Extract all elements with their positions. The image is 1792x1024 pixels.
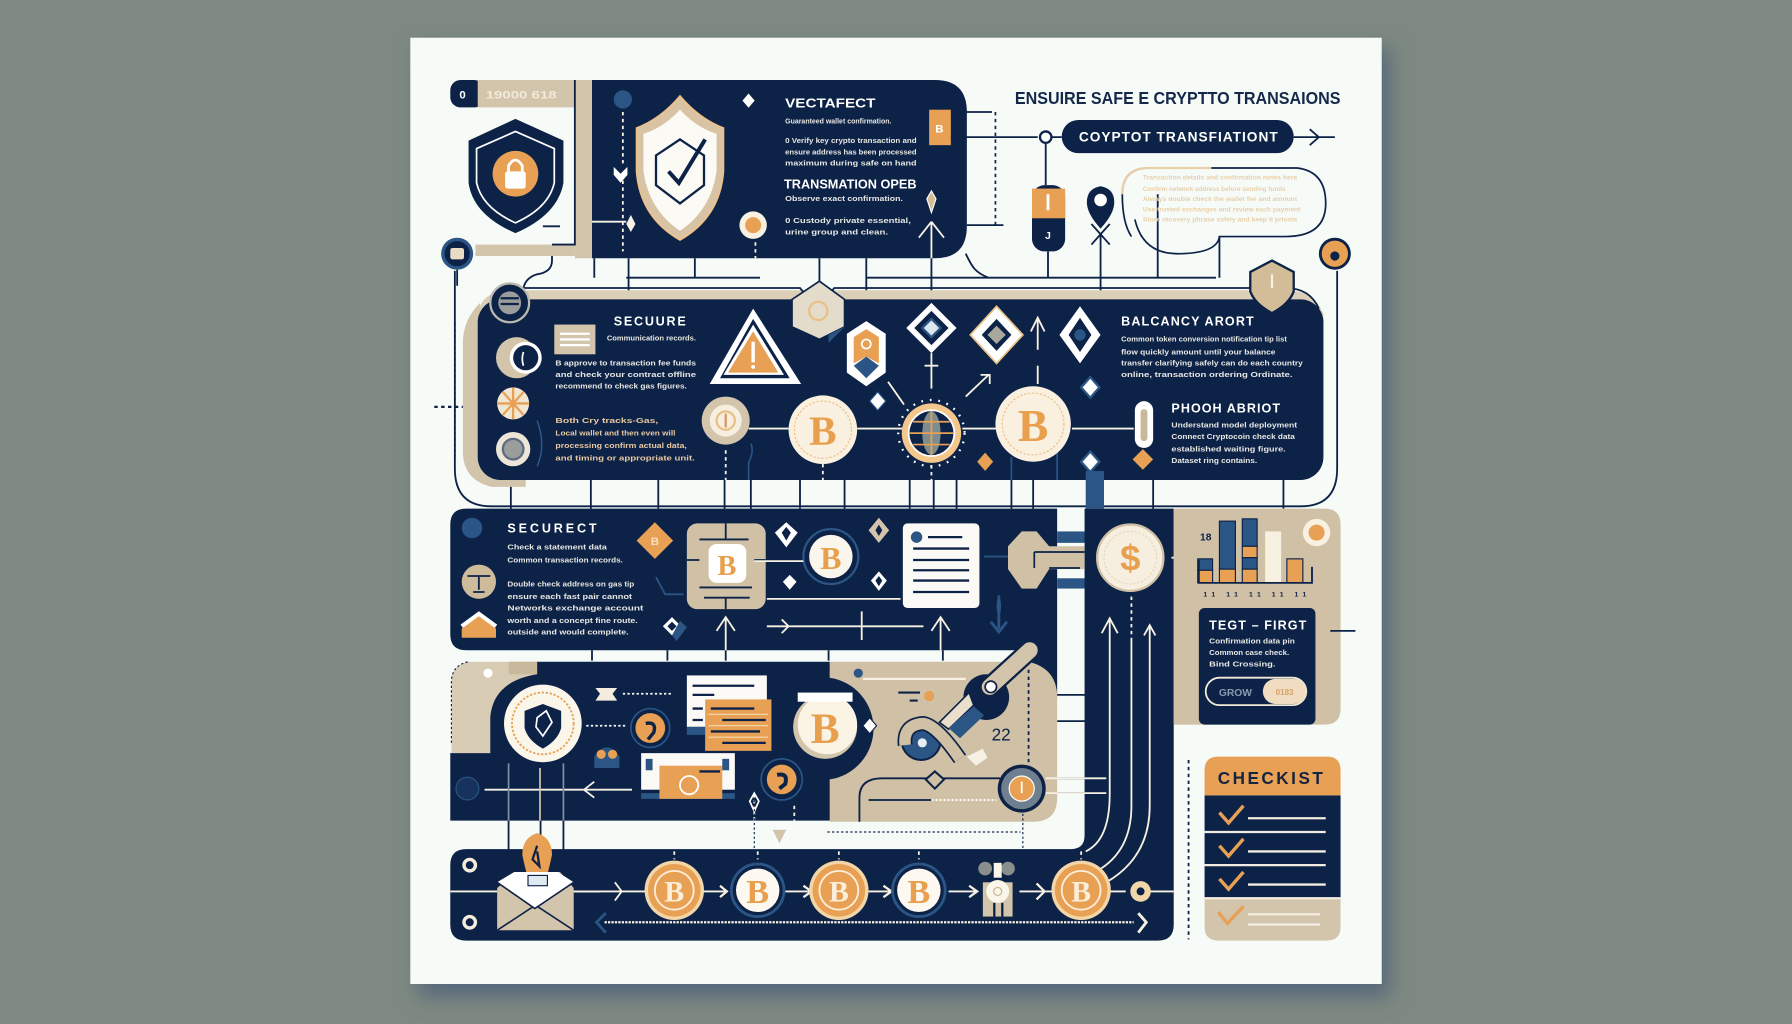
icon: capsule: J [1045, 231, 1051, 242]
test card: Common case check. [1209, 648, 1289, 657]
heading: VECTAFECT [785, 96, 876, 110]
text block: Common transaction records. [507, 555, 623, 564]
small diamonds [870, 377, 1153, 472]
chip box: B [717, 551, 736, 582]
text block [506, 543, 644, 636]
icon: warning triangle [710, 309, 801, 384]
node icon: right [1319, 238, 1351, 270]
tan left corner [451, 662, 537, 753]
flow arrows [574, 851, 1174, 901]
panel: top header tab and shield box: 0 [459, 89, 466, 101]
tan note icon [554, 325, 595, 354]
seal [504, 685, 582, 762]
tan right [830, 662, 1057, 822]
text block orange: Local wallet and then even will [555, 428, 675, 437]
speech bubble [1122, 168, 1326, 254]
central hexagon [792, 281, 845, 343]
small people icon [594, 747, 619, 768]
text block orange [555, 416, 695, 463]
text block: ensure address has been processed [785, 147, 917, 156]
text block [1121, 335, 1304, 379]
white channel bands [1057, 531, 1106, 793]
page sheet [410, 38, 1382, 984]
coin row: B [746, 873, 769, 911]
connector lines [434, 194, 1337, 661]
bar chart [1198, 519, 1312, 599]
pill: crypto transfer: COYPTOT TRANSFIATIONT [1079, 130, 1278, 145]
panel: lower workflow [450, 650, 1106, 822]
icon: padlock figure [978, 862, 1015, 917]
coin B: B [809, 408, 837, 454]
coin row [809, 861, 869, 920]
test card [1199, 608, 1315, 725]
coin B flat [793, 693, 877, 759]
panel: checklist [1205, 757, 1341, 941]
speech bubble: Store recovery phrase safely and keep it private [1143, 217, 1297, 224]
icon: house [462, 614, 496, 638]
coin row: B [907, 873, 930, 911]
coin B large [995, 386, 1071, 462]
arrows column [1086, 558, 1191, 882]
coin B medium [803, 529, 858, 584]
speech bubble: Transaction details and confirmation notes here [1143, 174, 1297, 181]
icon: tan disc [462, 565, 496, 599]
orange tag [929, 110, 951, 145]
coin globe [898, 400, 965, 466]
heading: TRANSMATION OPEB [784, 178, 917, 192]
text block [785, 116, 917, 168]
toggle: GROW [1219, 688, 1252, 699]
flow arrow left [456, 763, 794, 821]
coin row [893, 864, 945, 917]
speech bubble: Confirm network address before sending funds [1143, 186, 1286, 193]
coin B large: B [1018, 400, 1048, 451]
coin small [702, 397, 750, 445]
arrow: pill exit [1294, 129, 1335, 145]
text block: Networks exchange account [507, 603, 644, 612]
heading: SECURECT [507, 522, 597, 536]
coin dark small [761, 759, 802, 800]
icon: wrench [902, 650, 1030, 766]
text block: Double check address on gas tip [507, 579, 635, 588]
text block: Connect Cryptocoin check data [1171, 432, 1296, 441]
tan detail lines [854, 669, 1011, 745]
orange tag: B [935, 124, 944, 136]
text block [785, 194, 911, 236]
connector: dashed tag link [951, 112, 1062, 226]
dotted timeline [597, 913, 1146, 933]
icon: capsule [1032, 185, 1065, 251]
text block: recommend to check gas figures. [555, 382, 687, 391]
text block: and check your contract offline [555, 370, 696, 379]
text block [555, 334, 696, 391]
toggle: 0183 [1276, 688, 1294, 697]
panel: top header tab and shield box: 19000 618 [486, 89, 557, 101]
speech bubble: Always double check the wallet fee and amount [1143, 196, 1298, 203]
icon: envelope with bulb [450, 833, 600, 930]
icon: orange hexagon [847, 321, 886, 386]
panel: secure balance [463, 261, 1323, 509]
text block: Common token conversion notification tip list [1121, 335, 1287, 344]
pill: crypto transfer [1062, 120, 1294, 153]
text block: transfer clarifying safely can do each country [1121, 359, 1304, 368]
left column icons [496, 337, 542, 466]
text block: ensure each fast pair cannot [507, 592, 633, 601]
text block [1171, 420, 1298, 465]
shield badge [1250, 261, 1294, 313]
tan detail lines: 22 [992, 725, 1011, 745]
coin row: B [1071, 877, 1091, 909]
coin row: B [829, 877, 849, 909]
test card: TEGT – FIRGT [1209, 619, 1307, 633]
icon: orange diamond [637, 522, 673, 559]
coin B [789, 395, 857, 464]
coin B medium: B [820, 540, 842, 576]
panel: vector top [592, 80, 967, 258]
coin small dark [631, 709, 670, 747]
page shadow [418, 48, 1390, 997]
toggle [1206, 678, 1306, 705]
heading: SECUURE [614, 315, 686, 329]
coin row [645, 861, 704, 920]
bar chart: 11 11 11 11 11 [1203, 592, 1306, 599]
heading: CHECKIST [1218, 768, 1323, 788]
check items [1218, 806, 1326, 925]
icon: location pin [1087, 186, 1114, 245]
text block: urine group and clean. [785, 227, 888, 236]
coin row [731, 864, 784, 917]
text block: outside and would complete. [507, 627, 629, 636]
ribbon and dotted link [586, 688, 673, 726]
panel: tan test area [1174, 509, 1341, 725]
wiring to dial [859, 670, 1029, 822]
coin dollar: $ [1120, 537, 1140, 578]
text block: Understand model deployment [1171, 420, 1298, 429]
speech bubble: Use trusted exchanges and review each payment [1143, 206, 1301, 213]
orange badge [1303, 519, 1330, 546]
panel: top header tab and shield box [450, 80, 593, 258]
text block: Observe exact confirmation. [785, 194, 903, 203]
dial [998, 765, 1106, 813]
icon: blue dot [462, 518, 482, 538]
connector: dotted gap [509, 800, 1023, 880]
text block: Communication records. [607, 334, 696, 343]
ring markers [464, 859, 475, 928]
papers [687, 675, 771, 751]
bar chart: 18 [1200, 533, 1212, 544]
test card: Bind Crossing. [1209, 659, 1275, 668]
icon: wrench head [1008, 531, 1085, 589]
text block: B approve to transaction fee funds [555, 359, 696, 368]
bottom flow details [450, 833, 1174, 933]
coin row links [726, 429, 1134, 509]
panel: middle navy [450, 509, 1057, 697]
chip box [687, 523, 766, 609]
text block: maximum during safe on hand [785, 159, 917, 168]
icon: diamonds [906, 303, 1101, 363]
panel: navy column and bottom band [450, 509, 1191, 941]
text block: Guaranteed wallet confirmation. [785, 116, 891, 125]
text block orange: and timing or appropriate unit. [555, 454, 695, 463]
document [903, 523, 979, 608]
coin dollar [1097, 525, 1163, 591]
icon: large shield [637, 96, 723, 240]
connector: side tick [1330, 630, 1355, 632]
divider: dashed [1188, 760, 1190, 939]
text block orange: Both Cry tracks-Gas, [555, 416, 658, 425]
text block: Dataset ring contains. [1171, 456, 1257, 465]
coin B flat: B [811, 705, 840, 753]
text block: flow quickly amount until your balance [1121, 347, 1275, 356]
navy body [450, 662, 873, 821]
text block: 0 Verify key crypto transaction and [785, 136, 917, 145]
heading: BALCANCY ARORT [1121, 315, 1254, 329]
ring icon top-left [490, 283, 529, 322]
small node [1130, 881, 1151, 902]
card [641, 753, 735, 799]
links and arrows [656, 557, 1008, 650]
title: ENSUIRE SAFE E CRYPTTO TRANSAIONS [1015, 88, 1341, 108]
small panel icons [592, 90, 944, 258]
icon: capsule small [1135, 401, 1153, 448]
heading: PHOOH ABRIOT [1171, 402, 1280, 416]
test card: Confirmation data pin [1209, 636, 1295, 645]
coin row [1051, 861, 1111, 920]
icon: orange diamond: B [651, 536, 659, 548]
arrows in panel [888, 318, 1045, 405]
icon: lock shield [469, 119, 563, 233]
node icon: left [441, 238, 473, 286]
text block: Check a statement data [507, 543, 608, 552]
text block orange: processing confirm actual data, [555, 441, 687, 450]
text block: online, transaction ordering Ordinate. [1121, 370, 1293, 379]
text block: established waiting figure. [1171, 444, 1286, 453]
diamonds middle [663, 518, 889, 641]
text block: 0 Custody private essential, [785, 216, 911, 225]
text block: worth and a concept fine route. [506, 616, 638, 625]
coin row: B [664, 877, 684, 909]
